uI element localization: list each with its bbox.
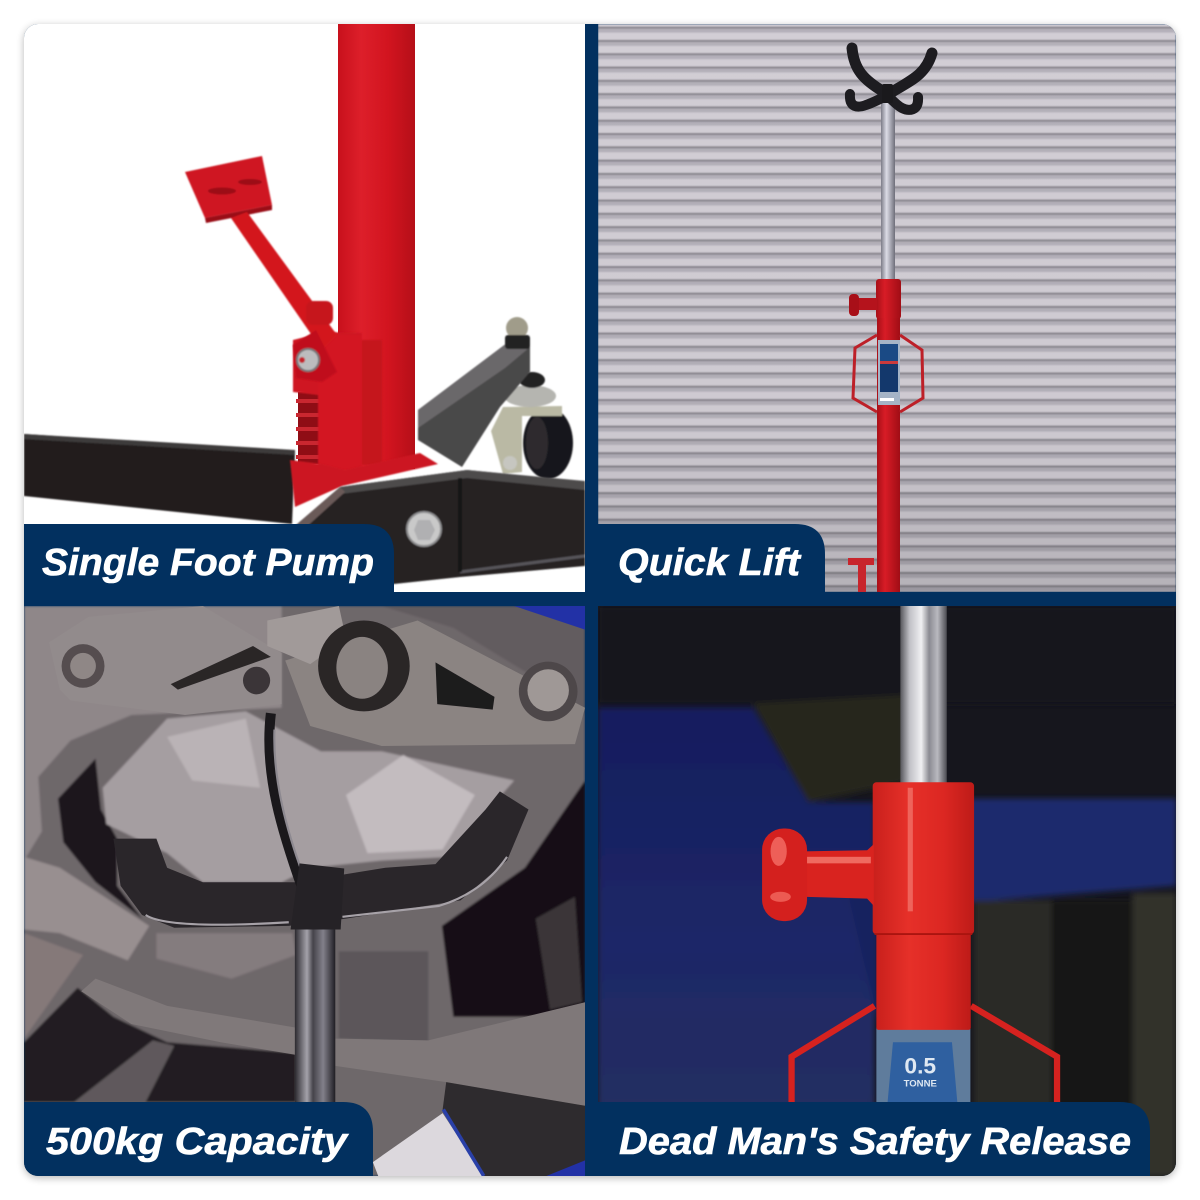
photo: red column [338, 24, 415, 469]
label: 500kg capacity: 500kg Capacity [46, 1121, 349, 1163]
panel: dead man's safety release [598, 606, 1176, 1177]
photo: blue lower label [876, 1028, 970, 1104]
photo: thin saddle rod [264, 712, 299, 886]
photo: release knob [849, 294, 877, 316]
label: single foot pump: Single Foot Pump [42, 542, 374, 584]
photo: small foot pedal [848, 558, 874, 592]
photo: telescopic pole [876, 95, 901, 592]
panel: quick lift [598, 24, 1176, 592]
label: dead man's safety release: Dead Man's Safety Release [619, 1121, 1131, 1163]
label: quick lift [598, 524, 825, 592]
photo: left beam [24, 434, 295, 524]
photo: hexagon guard arms [792, 1006, 1057, 1104]
photo: blue lower label: TONNE [904, 1079, 937, 1090]
panel: 500kg capacity [24, 606, 585, 1176]
label: quick lift: Quick Lift [618, 542, 801, 584]
photo: grey rear leg [418, 317, 530, 467]
photo: red cylinder [873, 782, 974, 1030]
photo: pump spring [296, 392, 319, 464]
photo: chrome shaft [900, 606, 947, 783]
photo: bracket [293, 332, 382, 474]
photo: lower crossmember [81, 979, 585, 1106]
photo: release knob [762, 828, 874, 921]
photo: floor, box and blue trolley [373, 606, 585, 1176]
label: dead man's safety release [598, 1102, 1150, 1176]
photo: red base plate [290, 453, 438, 507]
photo: saddle socket [291, 863, 344, 930]
photo: Y saddle [850, 48, 932, 110]
photo: black saddle arms [113, 791, 528, 928]
photo: castor wheel [491, 372, 573, 479]
photo: underside of vehicle [24, 606, 585, 1176]
photo: red hexagon guard [853, 335, 923, 412]
photo: blue lower label: 0.5 [904, 1053, 936, 1078]
photo: front cross beam [296, 469, 585, 586]
photo: blue product label [878, 340, 900, 405]
panel: single foot pump [24, 24, 585, 600]
photo: steel pole [295, 930, 335, 1104]
photo: saddle socket [882, 84, 893, 103]
photo: blurred workshop background [598, 696, 1176, 1176]
label: 500kg capacity [24, 1102, 373, 1176]
photo: foot pedal and lever [185, 156, 337, 382]
photo: control arm [49, 606, 585, 746]
label: single foot pump [24, 524, 394, 592]
